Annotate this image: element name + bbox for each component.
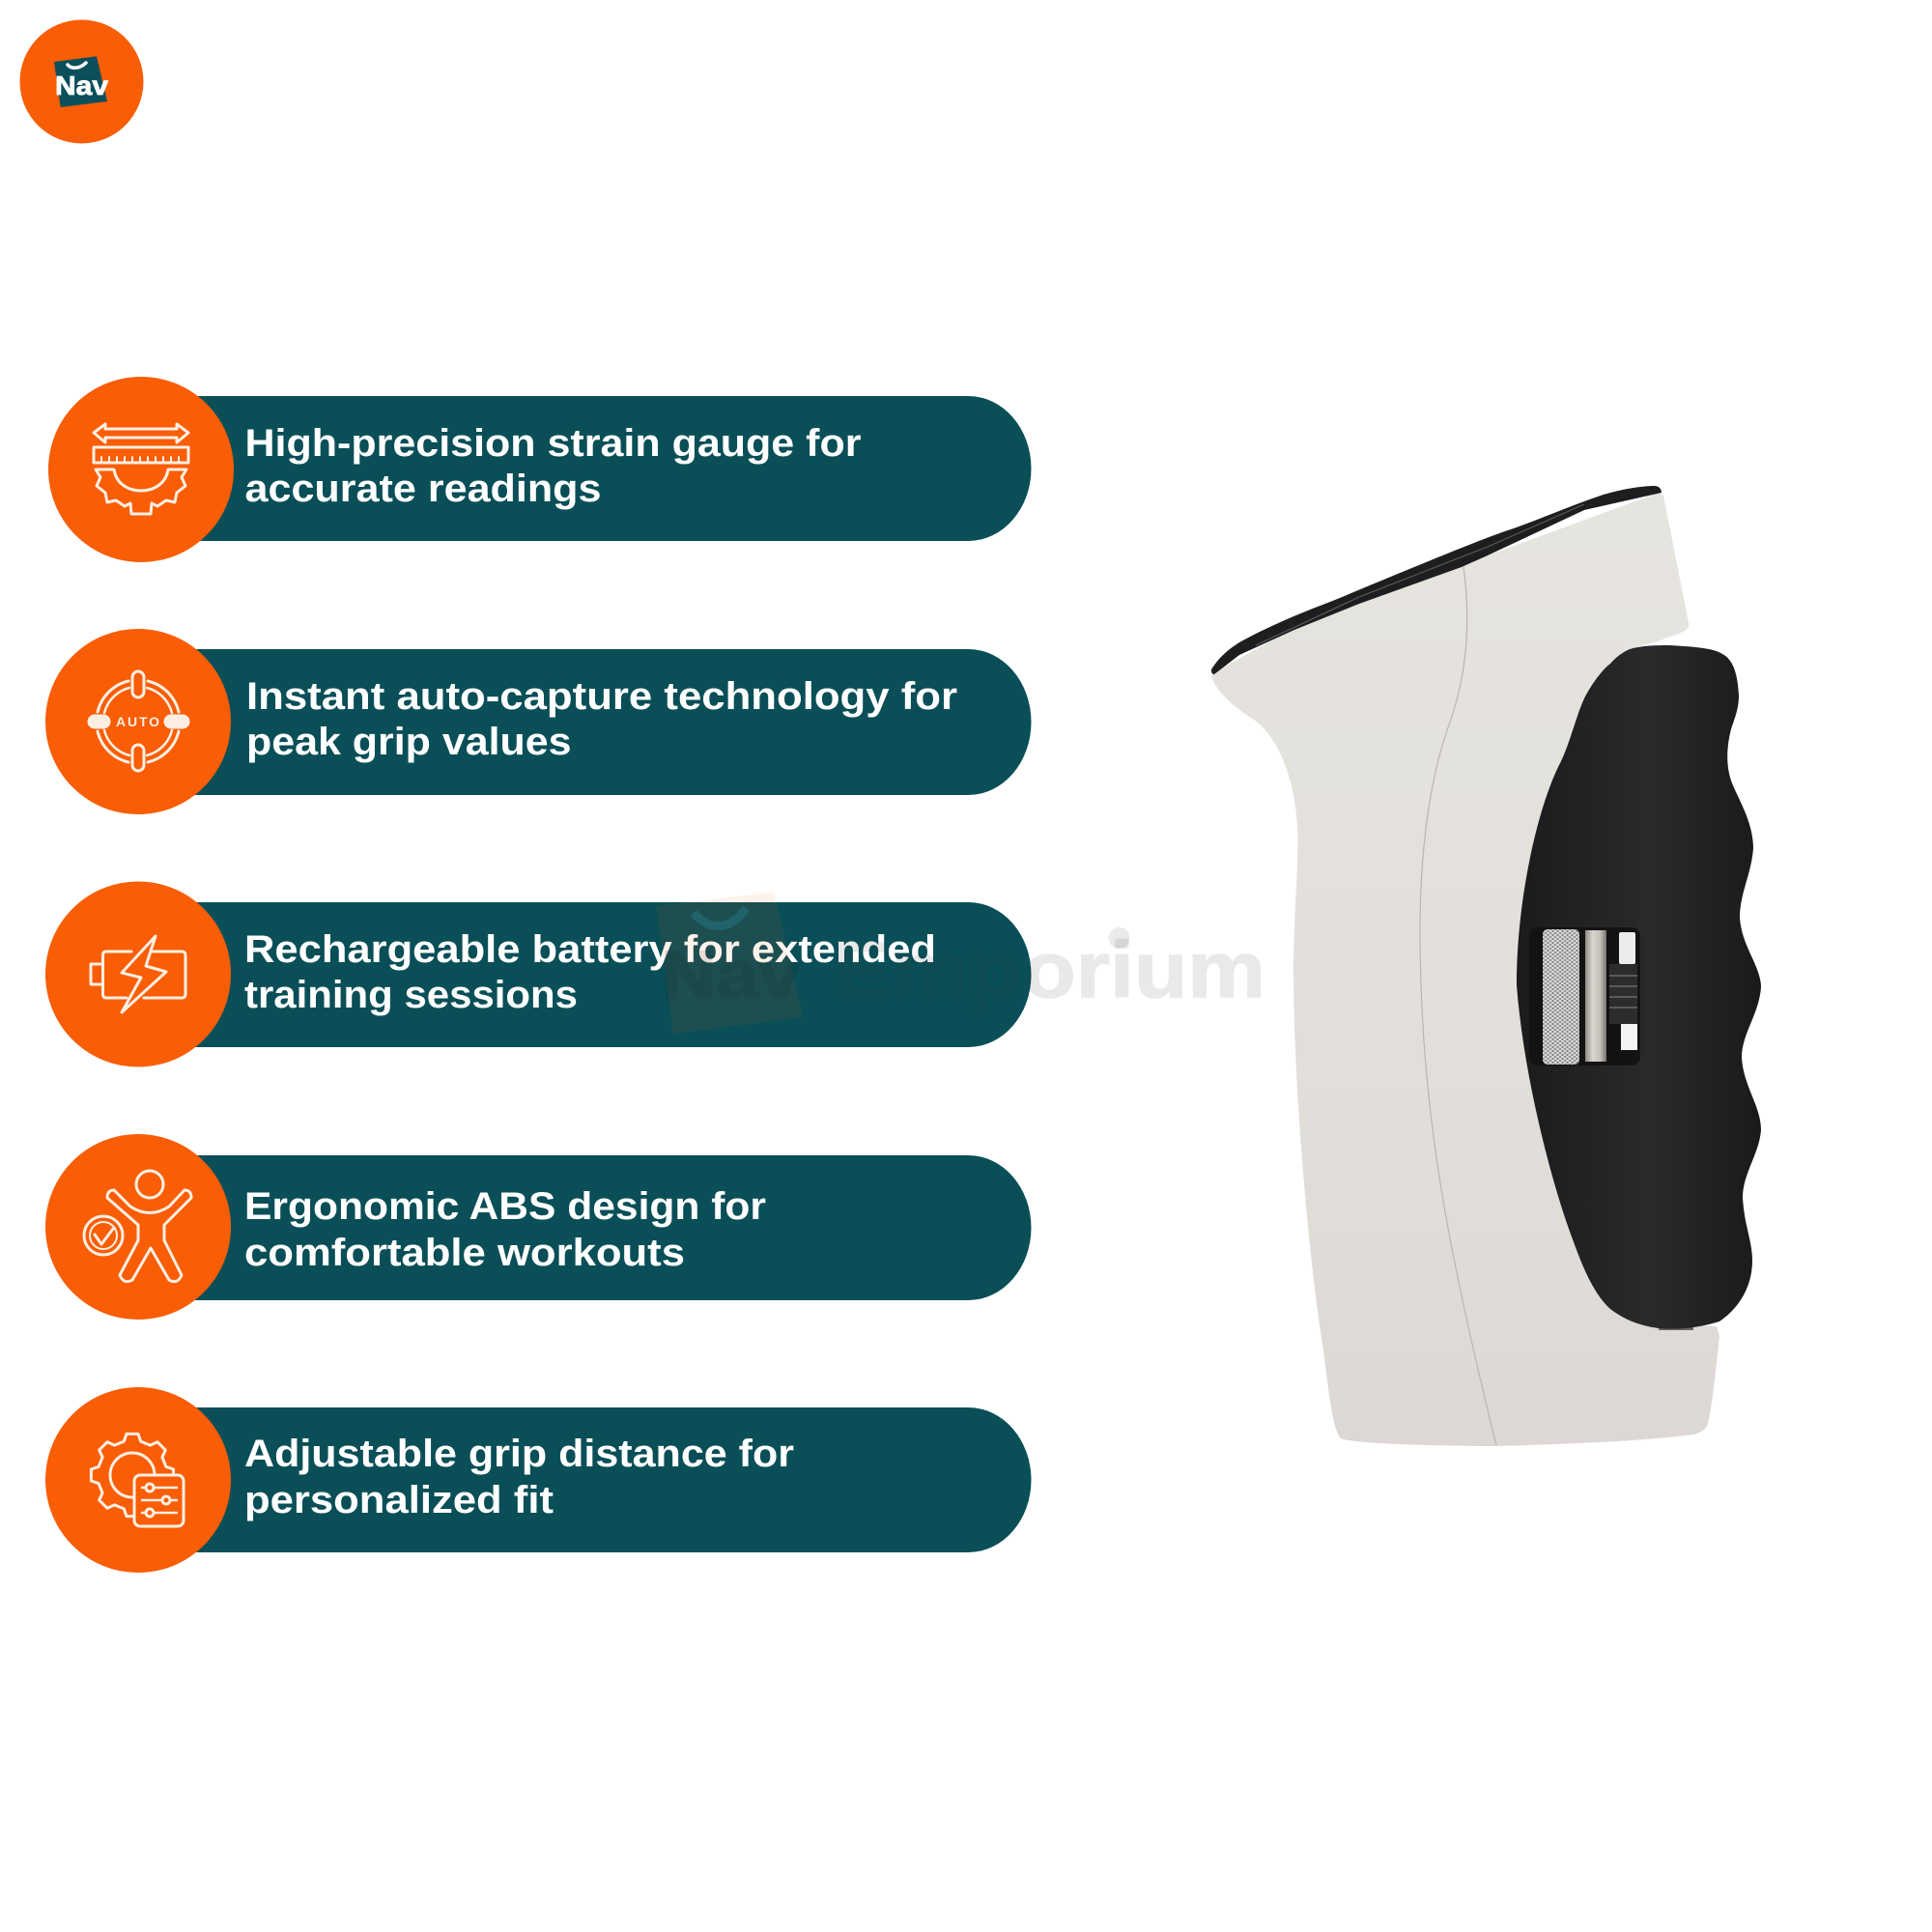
logo smile: [68, 63, 86, 68]
feature row 1: strain gauge: [48, 377, 1032, 562]
black contoured grip handle: [1517, 645, 1761, 1329]
text 5: personalized fit: [244, 1479, 554, 1521]
feature row 5: adjustable grip: [45, 1387, 1032, 1573]
feature row 4: ergonomic design: [45, 1134, 1032, 1320]
adjustment window: [1529, 927, 1640, 1065]
threaded rod: [1609, 964, 1637, 1024]
watermark: Nav Emporium: [657, 892, 1265, 1034]
watermark bag: [657, 892, 803, 1034]
text 3: training sessions: [244, 974, 578, 1016]
text 4: [244, 1185, 766, 1274]
product: grip dynamometer: [1211, 486, 1761, 1446]
text 3: [244, 928, 936, 1016]
pill 5: [138, 1407, 1032, 1552]
device body: [1211, 493, 1719, 1446]
text 2: [246, 675, 957, 763]
icon: person with check badge: [84, 1171, 191, 1282]
icon: auto capture target: [89, 671, 188, 771]
watermark smile: [694, 908, 746, 925]
logo badge: [19, 19, 143, 143]
text 1: [245, 422, 862, 510]
bottom tab under grip: [1659, 1321, 1693, 1330]
icon circle 1: [48, 377, 234, 562]
icon: gear with sliders: [91, 1434, 184, 1526]
text 5: [244, 1433, 794, 1521]
pill 4: [138, 1155, 1032, 1300]
text 1: accurate readings: [245, 468, 601, 510]
logo shopping-bag mark: [54, 56, 107, 107]
text 4: Ergonomic ABS design for: [244, 1185, 766, 1228]
pill 2: [138, 649, 1032, 795]
icon circle 4: [45, 1134, 231, 1320]
text 1: High-precision strain gauge for: [245, 422, 862, 465]
icon circle 5: [45, 1387, 231, 1573]
watermark wordmark: Emporium: [833, 926, 1265, 1014]
text 2: Instant auto-capture technology for: [246, 675, 957, 718]
steel collar: [1585, 930, 1606, 1062]
text 5: Adjustable grip distance for: [244, 1433, 794, 1475]
watermark logo text: Nav: [661, 937, 801, 1012]
knurled knob: [1543, 929, 1579, 1065]
text 2: peak grip values: [246, 721, 572, 763]
watermark globe dot: [1109, 927, 1130, 949]
top display edge: [1211, 486, 1662, 674]
icon: gauge with ruler and gear: [94, 424, 188, 514]
text 3: Rechargeable battery for extended: [244, 928, 936, 971]
icon circle 3: [45, 881, 231, 1066]
logo wordmark: Nav: [55, 71, 108, 100]
icon: auto capture target: AUTO: [116, 714, 159, 729]
feature row 3: rechargeable battery: [45, 881, 1032, 1066]
display edge highlight: [1256, 504, 1584, 645]
text 4: comfortable workouts: [244, 1232, 685, 1274]
icon: battery with bolt: [91, 936, 185, 1012]
icon circle 2: [45, 629, 231, 814]
casing seam: [1420, 566, 1496, 1445]
pill 3: [138, 902, 1032, 1047]
feature row 2: auto capture: [45, 629, 1032, 814]
pill 1: [141, 396, 1032, 541]
bracket tabs: [1619, 932, 1635, 964]
